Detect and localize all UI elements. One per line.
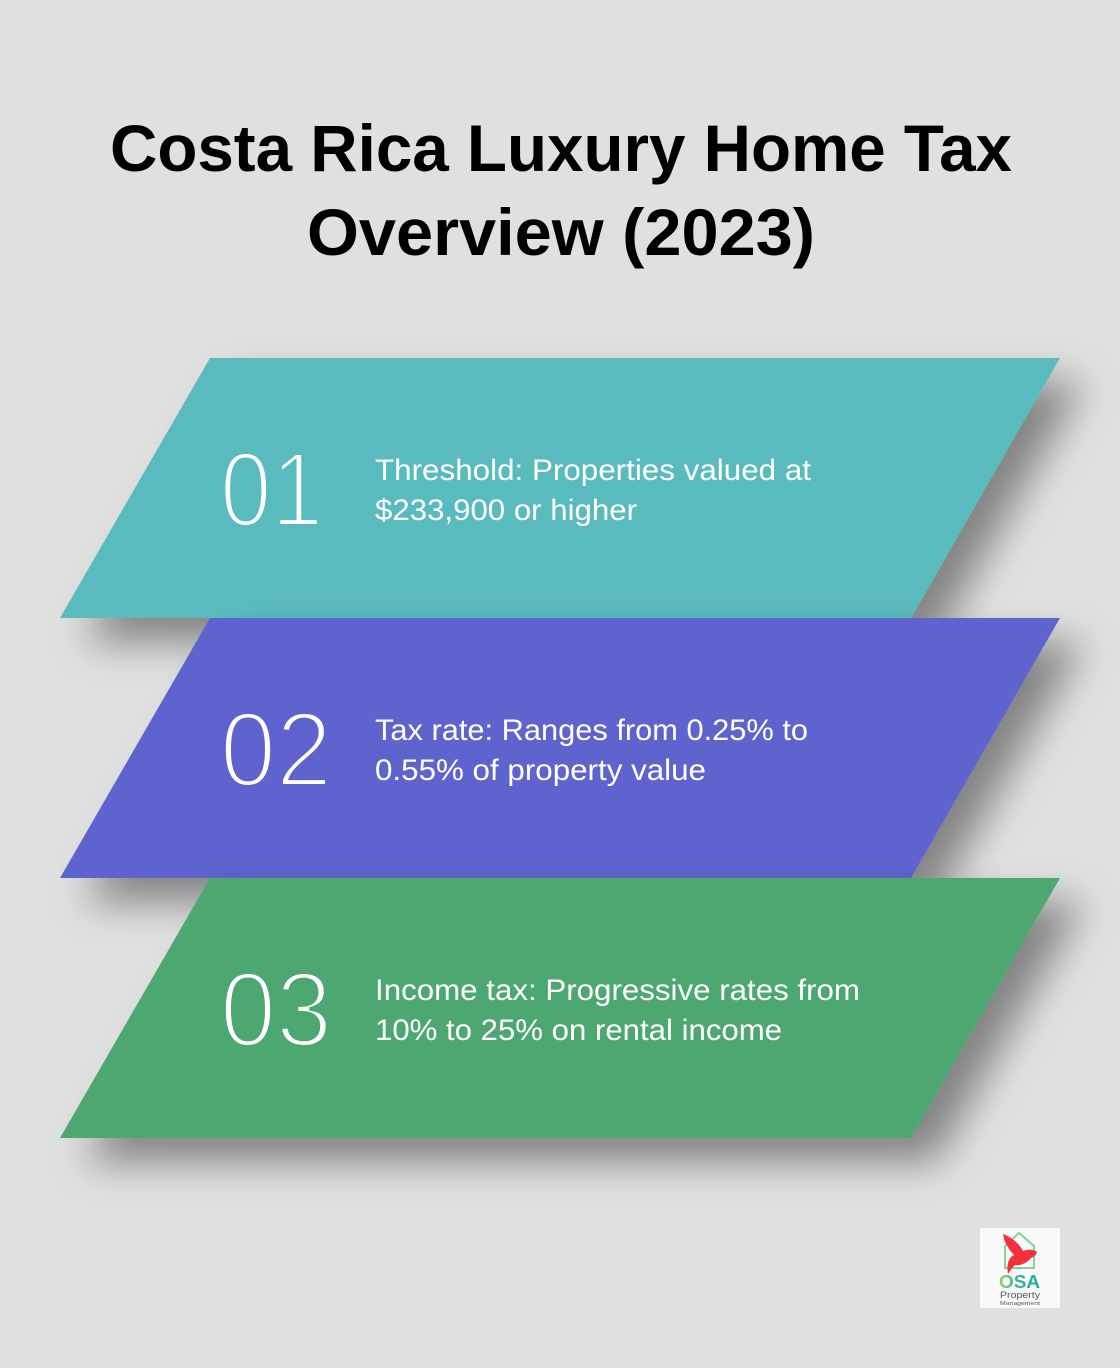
panel: 01 threshold	[60, 358, 1060, 618]
number 01: 01	[220, 431, 323, 549]
title	[110, 111, 1012, 269]
teal parallelogram	[60, 358, 1060, 618]
icon: OSA Property Management logo: Management	[1000, 1301, 1041, 1307]
number 02: 02	[220, 691, 332, 809]
text: tax rate	[375, 714, 808, 787]
indigo parallelogram	[60, 618, 1060, 878]
green parallelogram	[60, 878, 1060, 1138]
panel: 02 tax rate	[60, 618, 1060, 878]
text: threshold: $233,900 or higher	[375, 494, 637, 527]
title: Costa Rica Luxury Home Tax	[110, 111, 1012, 185]
icon: house outline	[1005, 1233, 1034, 1268]
number 03: 03	[220, 951, 332, 1069]
panel: 03 income tax	[60, 878, 1060, 1138]
text: tax rate: 0.55% of property value	[375, 754, 706, 787]
text: income tax: Income tax: Progressive rates from	[375, 974, 860, 1007]
text: income tax: 10% to 25% on rental income	[375, 1014, 782, 1047]
text: threshold	[375, 454, 812, 527]
text: income tax	[375, 974, 860, 1047]
text: threshold: Threshold: Properties valued at	[375, 454, 812, 487]
text: tax rate: Tax rate: Ranges from 0.25% to	[375, 714, 808, 747]
logo wordmark: OSA	[999, 1272, 1040, 1292]
icon: OSA Property Management logo	[980, 1228, 1060, 1308]
icon: OSA Property Management logo: Property	[1000, 1290, 1040, 1301]
icon: red bird	[1003, 1234, 1037, 1274]
title: Overview (2023)	[307, 195, 815, 269]
